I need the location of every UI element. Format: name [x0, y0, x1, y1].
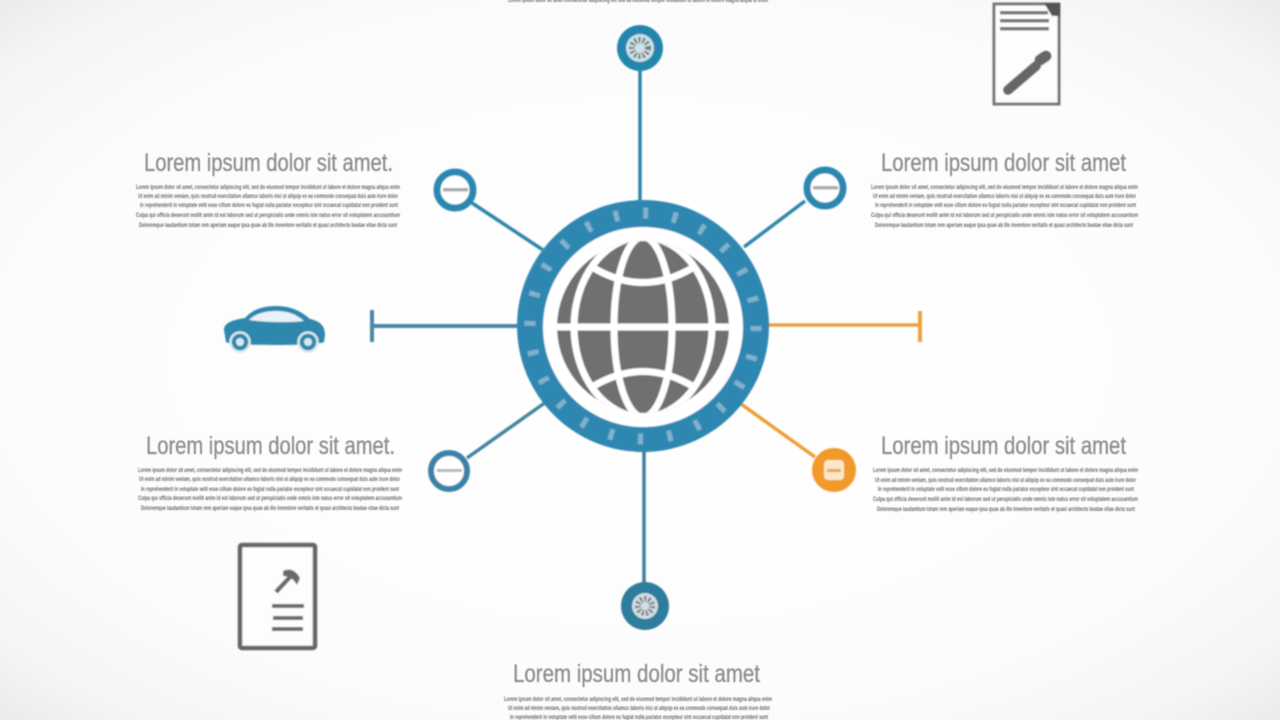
body text: [871, 184, 1138, 229]
body text: Doloremque laudantium totam rem aperiam eaque ipsa quae ab illo inventore veritatis et quasi architecto beatae vitae dicta sunt: [141, 505, 400, 512]
body text: Culpa qui officia deserunt mollit anim id est laborum sed ut perspiciatis unde omnis iste natus error sit voluptatem accusantium: [871, 212, 1138, 219]
icon: document with hammer: [240, 545, 315, 648]
body text: [136, 184, 400, 229]
spoke: left with end cap: [372, 310, 520, 342]
spoke: upper right: [744, 170, 843, 247]
body text: Lorem ipsum dolor sit amet, consectetur adipiscing elit, sed do eiusmod tempor incididunt ut labore et dolore magna aliqua enim: [136, 184, 400, 191]
heading: Lorem ipsum dolor sit amet: [881, 149, 1126, 177]
panel: bottom text: [504, 660, 772, 720]
panel: upper left text: [136, 149, 400, 229]
body text: Lorem ipsum dolor sit amet, consectetur adipiscing elit, sed do eiusmod tempor incididunt ut labore et dolore magna aliqua enim: [138, 467, 402, 474]
panel: lower right text: [873, 432, 1138, 513]
body text: Doloremque laudantium totam rem aperiam eaque ipsa quae ab illo inventore veritatis et quasi architecto beatae vitae dicta sunt: [139, 222, 398, 229]
body text: Culpa qui officia deserunt mollit anim id est laborum sed ut perspiciatis unde omnis iste natus error sit voluptatem accusantium: [136, 212, 400, 219]
body text: In reprehenderit in voluptate velit esse cillum dolore eu fugiat nulla pariatur excepteur sint occaecat cupidatat non proident sunt: [875, 202, 1137, 209]
body text: Doloremque laudantium totam rem aperiam eaque ipsa quae ab illo inventore veritatis et quasi architecto beatae vitae dicta sunt: [877, 506, 1136, 513]
body text: In reprehenderit in voluptate velit esse cillum dolore eu fugiat nulla pariatur excepteur sint occaecat cupidatat non proident sunt: [878, 486, 1135, 493]
body text: Doloremque laudantium totam rem aperiam eaque ipsa quae ab illo inventore veritatis et quasi architecto beatae vitae dicta sunt: [875, 222, 1134, 229]
body text: Culpa qui officia deserunt mollit anim id est laborum sed ut perspiciatis unde omnis iste natus error sit voluptatem accusantium: [138, 495, 402, 502]
body text: Ut enim ad minim veniam, quis nostrud exercitation ullamco laboris nisi ut aliquip ex ea commodo consequat duis aute irure dolor: [875, 477, 1136, 484]
body text: Ut enim ad minim veniam, quis nostrud exercitation ullamco laboris nisi ut aliquip ex ea commodo consequat duis aute irure dolor: [873, 193, 1136, 200]
inner white disc: [543, 227, 743, 427]
panel: upper right text: [871, 149, 1138, 229]
body text: [504, 696, 772, 720]
spoke: bottom: [621, 450, 669, 630]
outer blue ring: [517, 200, 769, 452]
panel: lower left text: [138, 432, 402, 512]
heading: Lorem ipsum dolor sit amet.: [144, 149, 393, 177]
body text: Lorem ipsum dolor sit amet, consectetur adipiscing elit, sed do eiusmod tempor incididunt ut labore et dolore magna aliqua enim: [504, 696, 772, 703]
central globe badge: [517, 200, 769, 452]
body text: In reprehenderit in voluptate velit esse cillum dolore eu fugiat nulla pariatur excepteur sint occaecat cupidatat non proident sunt: [141, 486, 400, 493]
spoke: lower left: [431, 402, 546, 489]
body text: [873, 467, 1138, 513]
body text: Ut enim ad minim veniam, quis nostrud exercitation ullamco laboris nisi ut aliquip ex ea commodo consequat duis aute irure dolor: [508, 705, 770, 712]
icon: globe: [550, 237, 736, 417]
heading: Lorem ipsum dolor sit amet: [881, 432, 1126, 460]
spoke: lower right orange: [741, 404, 856, 492]
body text: Ut enim ad minim veniam, quis nostrud exercitation ullamco laboris nisi ut aliquip ex ea commodo consequat duis aute irure dolor: [138, 193, 398, 200]
body text: Lorem ipsum dolor sit amet, consectetur adipiscing elit, sed do eiusmod tempor incididunt ut labore et dolore magna aliqua enim: [873, 467, 1138, 474]
heading: Lorem ipsum dolor sit amet: [513, 660, 760, 688]
icon: car: [224, 306, 325, 352]
body text: Ut enim ad minim veniam, quis nostrud exercitation ullamco laboris nisi ut aliquip ex ea commodo consequat duis aute irure dolor: [139, 476, 400, 483]
ring tick marks: [530, 213, 756, 439]
spoke: top: [617, 25, 663, 202]
spoke: right with end cap: [766, 311, 920, 342]
icon: document with pen: [994, 3, 1060, 104]
body text: In reprehenderit in voluptate velit esse cillum dolore eu fugiat nulla pariatur excepteur sint occaecat cupidatat non proident sunt: [140, 202, 399, 209]
spoke: upper left: [437, 172, 543, 250]
body text: Lorem ipsum dolor sit amet, consectetur adipiscing elit, sed do eiusmod tempor incididunt ut labore et dolore magna aliqua enim: [871, 184, 1138, 191]
body text: Culpa qui officia deserunt mollit anim id est laborum sed ut perspiciatis unde omnis iste natus error sit voluptatem accusantium: [873, 496, 1138, 503]
heading: Lorem ipsum dolor sit amet.: [146, 432, 395, 460]
body text: [138, 467, 402, 512]
